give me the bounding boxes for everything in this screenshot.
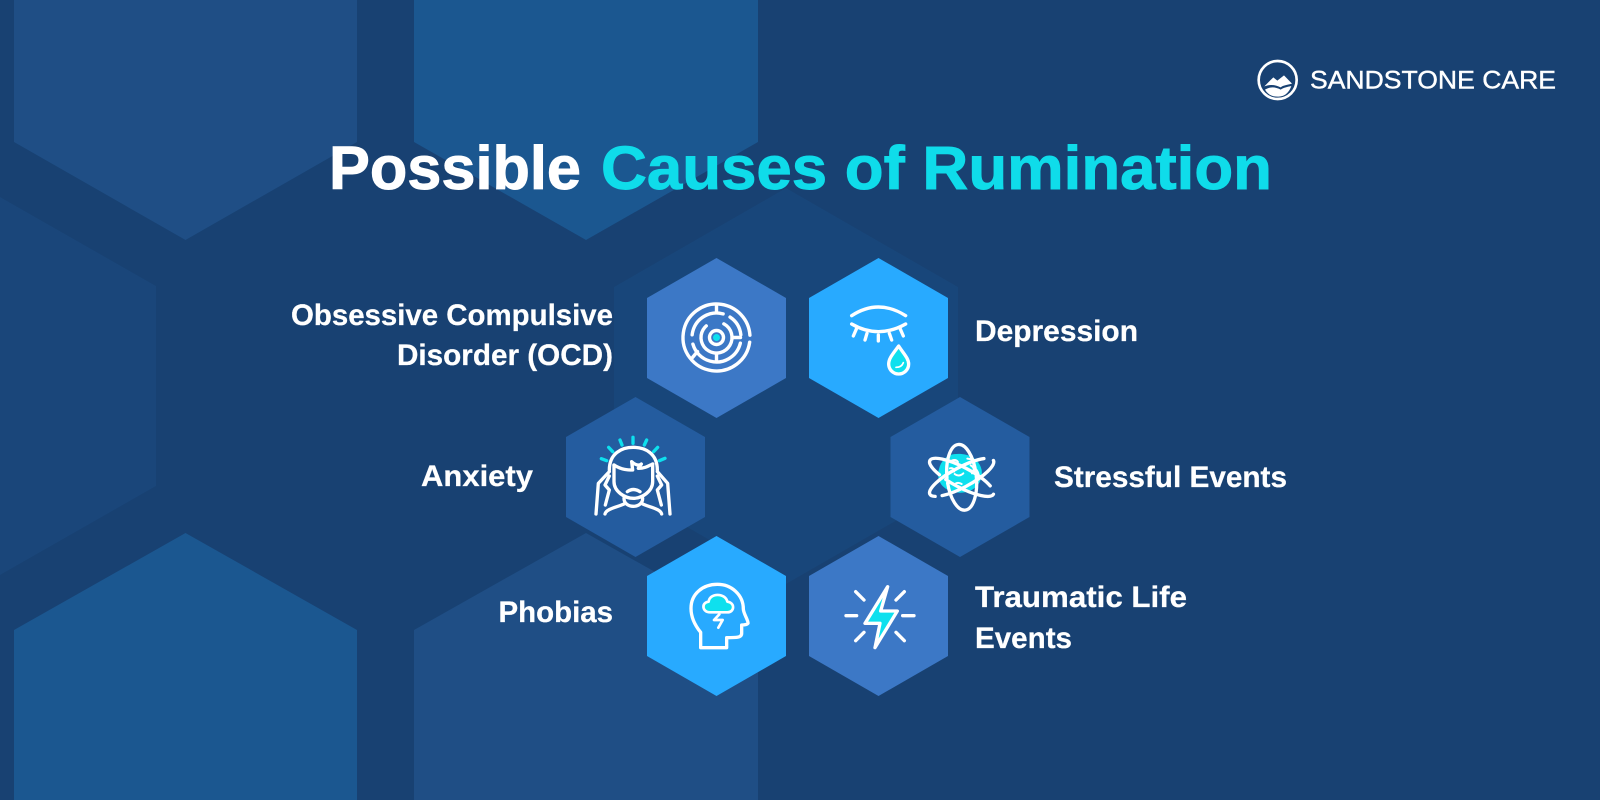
label: Phobias: Phobias — [498, 596, 613, 629]
hexagon: OCD — [647, 258, 786, 418]
label: Traumatic Life Events: Events — [975, 622, 1072, 655]
item: Obsessive Compulsive Disorder — [291, 258, 786, 418]
label: Depression: Depression — [975, 315, 1138, 348]
label: Traumatic Life Events: Traumatic Life — [975, 581, 1187, 614]
logo: Sandstone Care — [1259, 61, 1556, 99]
label: OCD — [291, 299, 613, 372]
icon: atom with brain — [925, 443, 998, 512]
label: Anxiety: Anxiety — [421, 460, 534, 493]
item: Depression — [809, 258, 1138, 418]
hexagon: Anxiety — [566, 397, 705, 557]
item: Traumatic Life Events — [809, 536, 1187, 696]
hexagon: Traumatic Life Events — [809, 536, 948, 696]
title: Possible — [329, 134, 581, 202]
icon: mountain in circle — [1259, 61, 1297, 99]
icon: maze — [679, 300, 754, 375]
item: Anxiety — [421, 397, 705, 557]
label: Stressful Events: Stressful Events — [1054, 461, 1287, 494]
hexagon: Stressful Events — [890, 397, 1030, 557]
icon: crying eye — [852, 307, 909, 374]
label: OCD: Disorder (OCD) — [397, 339, 613, 372]
hexagon: Depression — [809, 258, 948, 418]
icon: head with storm cloud — [691, 584, 748, 648]
label: Traumatic Life Events — [975, 581, 1187, 655]
label: OCD: Obsessive Compulsive — [291, 299, 613, 332]
item: Stressful Events — [890, 397, 1287, 557]
title: Causes of Rumination — [601, 134, 1272, 202]
item: Phobias — [498, 536, 786, 696]
icon: lightning bolt — [846, 587, 914, 648]
logo: Sandstone Care: SANDSTONE CARE — [1310, 66, 1556, 94]
title — [329, 134, 1272, 202]
hexagon: Phobias — [647, 536, 786, 696]
icon: person holding head — [596, 437, 670, 514]
